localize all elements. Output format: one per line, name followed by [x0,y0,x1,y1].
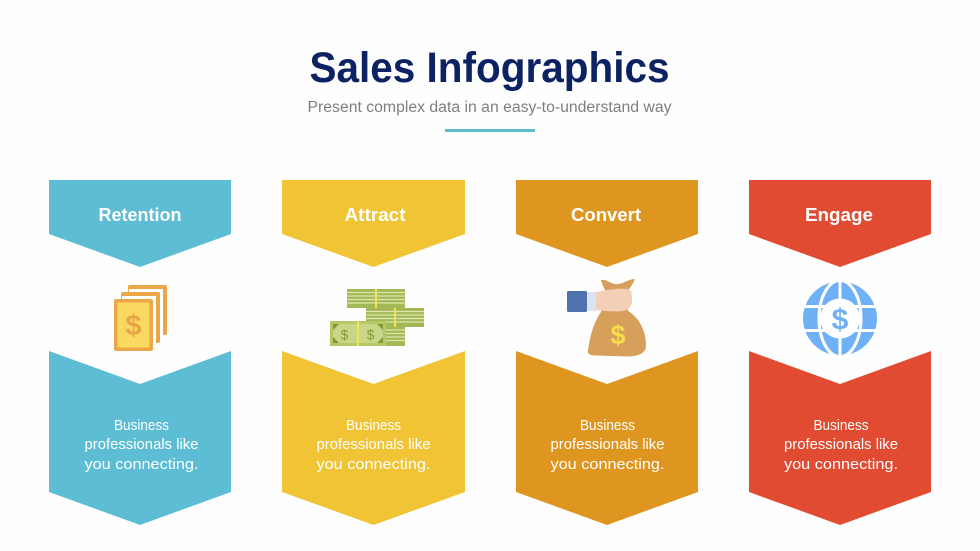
icon: stack of dollar cards: $ [125,310,142,342]
heading banner: convert: Convert [571,204,641,225]
icon: stacks of banknotes [330,289,424,346]
text panel: attract: Business [346,417,401,434]
text panel: retention: Business [114,417,169,434]
panel: convert [516,180,698,525]
text panel: retention: professionals like [84,436,198,453]
text panel: convert: you connecting. [550,456,664,473]
heading banner: attract: Attract [344,204,406,225]
icon: hand holding money bag: $ [610,320,626,350]
text panel: convert: Business [580,417,635,434]
icon: stacks of banknotes: $ [341,328,349,342]
panel: attract [282,180,465,525]
heading banner: engage: Engage [805,204,873,225]
text panel: engage: you connecting. [784,456,898,473]
title underline [445,129,535,132]
text panel: attract [282,351,465,525]
title: Sales Infographics [310,44,670,92]
text panel: attract: professionals like [316,436,430,453]
icon: stack of dollar cards [114,285,167,351]
icon: hand holding money bag [567,279,646,356]
text panel: retention [49,351,231,525]
text panel: attract: you connecting. [316,456,430,473]
text panel: engage: Business [814,417,868,434]
heading banner: retention [49,180,231,267]
panel: engage [749,180,931,525]
text panel: engage: professionals like [784,436,898,453]
text panel: convert [516,351,698,525]
panel: retention [49,180,231,525]
text panel: convert: professionals like [550,436,664,453]
subtitle: Present complex data in an easy-to-understand way [308,99,672,116]
heading banner: convert [516,180,698,267]
text panel: retention: you connecting. [84,456,198,473]
text panel: engage [749,351,931,525]
heading banner: attract [282,180,465,267]
icon: stacks of banknotes: $ [367,328,375,342]
heading banner: engage [749,180,931,267]
icon: dollar globe [802,280,878,357]
icon: dollar globe: $ [832,304,849,336]
heading banner: retention: Retention [98,204,182,225]
